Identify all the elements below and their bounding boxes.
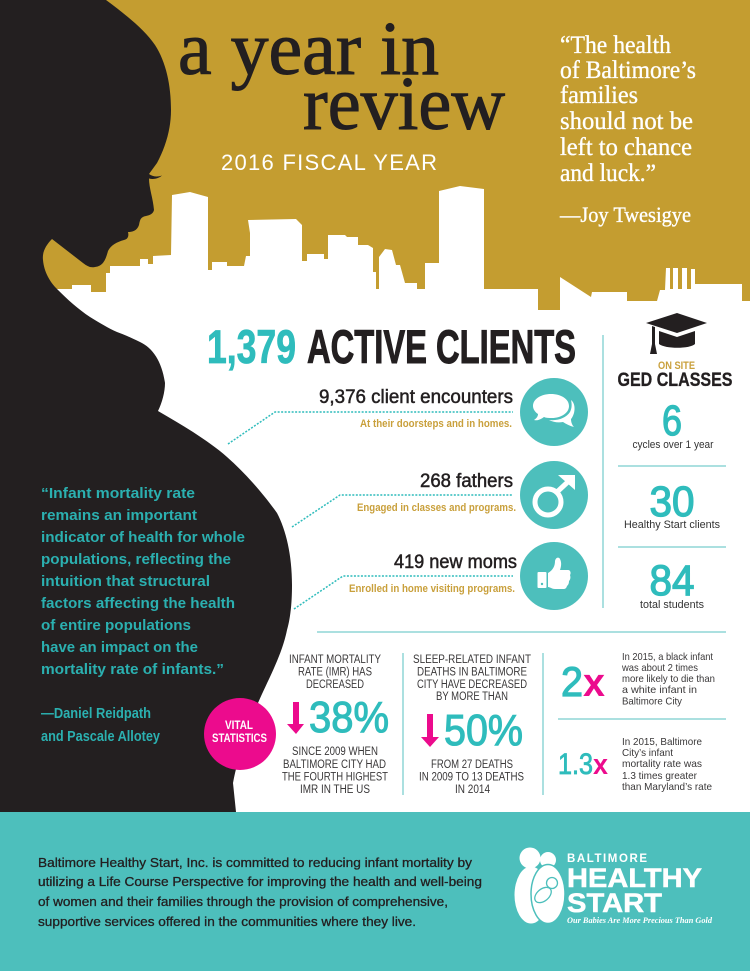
panel: GED classes: GED CLASSES [618, 370, 732, 391]
panel: GED classes: 6 [662, 397, 682, 445]
quote: Joy Twesigye [559, 30, 696, 227]
stat: 2x: Baltimore City [622, 696, 683, 708]
stat: sleep-related deaths 50%: IN 2009 TO 13 DEATHS [419, 772, 524, 784]
stat: 2x: x [583, 661, 605, 705]
logo: Baltimore Healthy Start: BALTIMORE [567, 853, 647, 865]
stat: sleep-related deaths 50%: 50% [444, 706, 523, 755]
stat: sleep-related deaths 50%: CITY HAVE DECREASED [417, 679, 527, 691]
row: new moms: 419 new moms [394, 552, 517, 573]
divider: between multipliers [558, 718, 726, 720]
left quote: infant mortality: indicator of health for whole [41, 529, 245, 546]
row: client encounters: At their doorsteps and in homes. [360, 418, 512, 430]
heading: active clients: 1,379 [207, 320, 296, 373]
footer band [0, 812, 750, 971]
stat: sleep-related deaths 50%: IN 2014 [455, 784, 491, 796]
silhouette of pregnant woman [0, 0, 292, 812]
left quote: infant mortality: populations, reflecting the [41, 551, 231, 568]
left quote: infant mortality: remains an important [41, 507, 197, 524]
divider: GED column [602, 335, 604, 608]
heading: active clients: ACTIVE CLIENTS [307, 320, 576, 373]
stat: IMR decreased 38%: THE FOURTH HIGHEST [282, 772, 388, 784]
stat: sleep-related deaths 50%: FROM 27 DEATHS [431, 759, 513, 771]
subtitle: 2016 FISCAL YEAR [221, 150, 437, 175]
row: fathers: Engaged in classes and programs. [357, 502, 516, 514]
icon: thumbs up [520, 542, 588, 610]
footer text: utilizing a Life Course Perspective for improving the health and well-being [38, 875, 482, 889]
panel: GED classes: total students [640, 599, 704, 611]
panel: GED classes: Healthy Start clients [624, 519, 720, 531]
stat: 1.3x: than Maryland’s rate [622, 781, 712, 793]
stat: 1.3x: mortality rate was [622, 758, 702, 770]
left quote: infant mortality: “Infant mortality rate [41, 485, 195, 502]
badge: vital statistics [204, 698, 276, 770]
panel: GED classes: ON SITE [658, 360, 695, 372]
divider: between stats [402, 653, 404, 795]
stat: 1.3x [558, 736, 712, 793]
stat: 1.3x: 1.3 times greater [622, 770, 697, 782]
stat: 2x: a white infant in [622, 684, 697, 696]
panel: GED classes: 84 [650, 557, 694, 605]
left quote: infant mortality: mortality rate of infants.” [41, 661, 224, 678]
logo: Baltimore Healthy Start [514, 848, 713, 925]
left quote: infant mortality: and Pascale Allotey [41, 728, 161, 745]
stat: 2x [561, 651, 715, 708]
footer text [38, 856, 482, 929]
stat: sleep-related deaths 50%: BY MORE THAN [436, 691, 508, 703]
quote: Joy Twesigye: left to chance [560, 132, 692, 161]
quote: Joy Twesigye: should not be [560, 106, 693, 135]
left quote: infant mortality: of entire populations [41, 617, 191, 634]
panel: GED classes: cycles over 1 year [632, 439, 714, 451]
title [178, 7, 505, 146]
quote: Joy Twesigye: families [560, 80, 638, 109]
quote: Joy Twesigye: and luck.” [560, 158, 656, 187]
logo: Baltimore Healthy Start: HEALTHY [567, 863, 702, 893]
footer text: supportive services offered in the communities where they live. [38, 915, 416, 929]
stat: 2x: 2 [561, 658, 583, 705]
stat: IMR decreased 38%: RATE (IMR) HAS [298, 666, 372, 678]
quote: Joy Twesigye: —Joy Twesigye [559, 202, 691, 227]
quote: Joy Twesigye: “The health [560, 30, 671, 59]
left quote: infant mortality: factors affecting the health [41, 595, 235, 612]
left quote: infant mortality [41, 485, 245, 745]
left quote: infant mortality: have an impact on the [41, 639, 198, 656]
stat: 1.3x: 1.3 [558, 748, 593, 781]
footer text: Baltimore Healthy Start, Inc. is committed to reducing infant mortality by [38, 856, 473, 870]
row: new moms [294, 552, 517, 609]
stat: IMR decreased 38% [282, 654, 389, 796]
stat: 1.3x: x [593, 749, 608, 781]
stat: IMR decreased 38%: BALTIMORE CITY HAD [283, 759, 386, 771]
stat: 2x: more likely to die than [622, 673, 715, 685]
panel: GED classes [618, 360, 732, 611]
row: client encounters [228, 387, 513, 444]
title: review [303, 62, 505, 146]
stat: IMR decreased 38%: DECREASED [306, 679, 364, 691]
icon: male symbol [520, 461, 588, 529]
title: a year in [178, 7, 439, 91]
row: fathers: 268 fathers [420, 471, 513, 492]
heading: active clients [207, 320, 576, 373]
stat: 2x: In 2015, a black infant [622, 651, 713, 663]
icon: graduation cap [646, 313, 707, 354]
stat: sleep-related deaths 50% [413, 654, 531, 796]
icon: speech bubbles [520, 378, 588, 446]
row: new moms: Enrolled in home visiting programs. [349, 583, 515, 595]
stat: IMR decreased 38%: IMR IN THE US [300, 784, 370, 796]
footer text: of women and their families through the provision of comprehensive, [38, 895, 448, 909]
row: client encounters: 9,376 client encounters [319, 387, 513, 408]
gold header background [0, 0, 750, 330]
quote: Joy Twesigye: of Baltimore’s [560, 55, 696, 84]
divider: vital statistics top [317, 631, 726, 633]
divider: multipliers [542, 653, 544, 795]
logo: Baltimore Healthy Start: START [567, 888, 663, 918]
badge: vital statistics: VITAL [225, 720, 253, 732]
stat: 1.3x: City’s infant [622, 747, 673, 759]
stat: sleep-related deaths 50%: DEATHS IN BALTIMORE [417, 666, 527, 678]
stat: IMR decreased 38%: 38% [309, 693, 389, 742]
stat: 1.3x: In 2015, Baltimore [622, 736, 702, 748]
stat: IMR decreased 38%: SINCE 2009 WHEN [292, 746, 378, 758]
logo: Baltimore Healthy Start: Our Babies Are More Precious Than Gold [567, 915, 713, 925]
stat: IMR decreased 38%: INFANT MORTALITY [289, 654, 381, 666]
stat: 2x: was about 2 times [621, 662, 698, 674]
badge: vital statistics: STATISTICS [212, 733, 267, 745]
left quote: infant mortality: intuition that structural [41, 573, 210, 590]
stat: sleep-related deaths 50%: SLEEP-RELATED INFANT [413, 654, 531, 666]
panel: GED classes: 30 [650, 478, 694, 526]
left quote: infant mortality: —Daniel Reidpath [41, 705, 151, 722]
row: fathers [292, 471, 516, 527]
